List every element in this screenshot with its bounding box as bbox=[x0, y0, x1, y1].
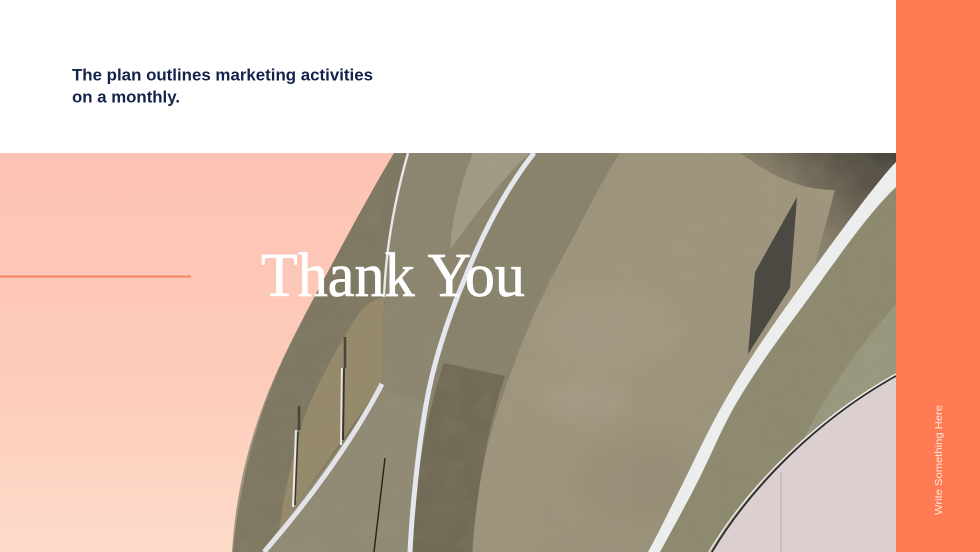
title: Thank You bbox=[261, 242, 525, 310]
photo: lighter right strip bbox=[802, 304, 896, 442]
photo: pink wall bbox=[712, 377, 896, 552]
photo: third band bbox=[411, 153, 620, 552]
photo: thin rods bbox=[293, 337, 385, 552]
text block: intro bbox=[72, 66, 373, 106]
photo: black and white line bbox=[712, 376, 896, 552]
photo: green band texture bbox=[768, 428, 822, 479]
photo: thin white line bbox=[384, 153, 408, 297]
photo: tan recess bbox=[279, 297, 384, 530]
photo: lighter strip bbox=[450, 153, 530, 250]
photo: lower column bbox=[262, 391, 382, 552]
intro line 2: on a monthly. bbox=[72, 88, 180, 106]
photo: wide white strip bbox=[648, 162, 896, 552]
photo: diagonal white strip bbox=[264, 384, 382, 552]
sidebar bbox=[896, 0, 980, 552]
photo: right green band bbox=[660, 187, 896, 552]
photo: dark corner bbox=[740, 153, 896, 267]
intro line 1: The plan outlines marketing activities bbox=[72, 66, 373, 84]
photo: concrete texture bbox=[872, 160, 893, 175]
background: white bbox=[0, 0, 896, 153]
photo: dark window bbox=[748, 197, 797, 354]
photo: white curved strip bbox=[410, 153, 534, 552]
photo: wall seam bbox=[780, 472, 782, 552]
sidebar vertical label: Write Something Here bbox=[934, 405, 945, 515]
photo: dark stained patch bbox=[410, 363, 505, 552]
photo: main concrete vault bbox=[232, 153, 896, 552]
photo: column band bbox=[382, 153, 530, 402]
photo: black line highlight bbox=[709, 374, 896, 552]
photo: curved concrete architecture bbox=[225, 153, 896, 552]
photo: outer dark band bbox=[233, 153, 408, 552]
photo: shaded patches bbox=[535, 285, 700, 520]
panel: pink gradient bbox=[0, 153, 420, 552]
accent line bbox=[0, 276, 191, 278]
